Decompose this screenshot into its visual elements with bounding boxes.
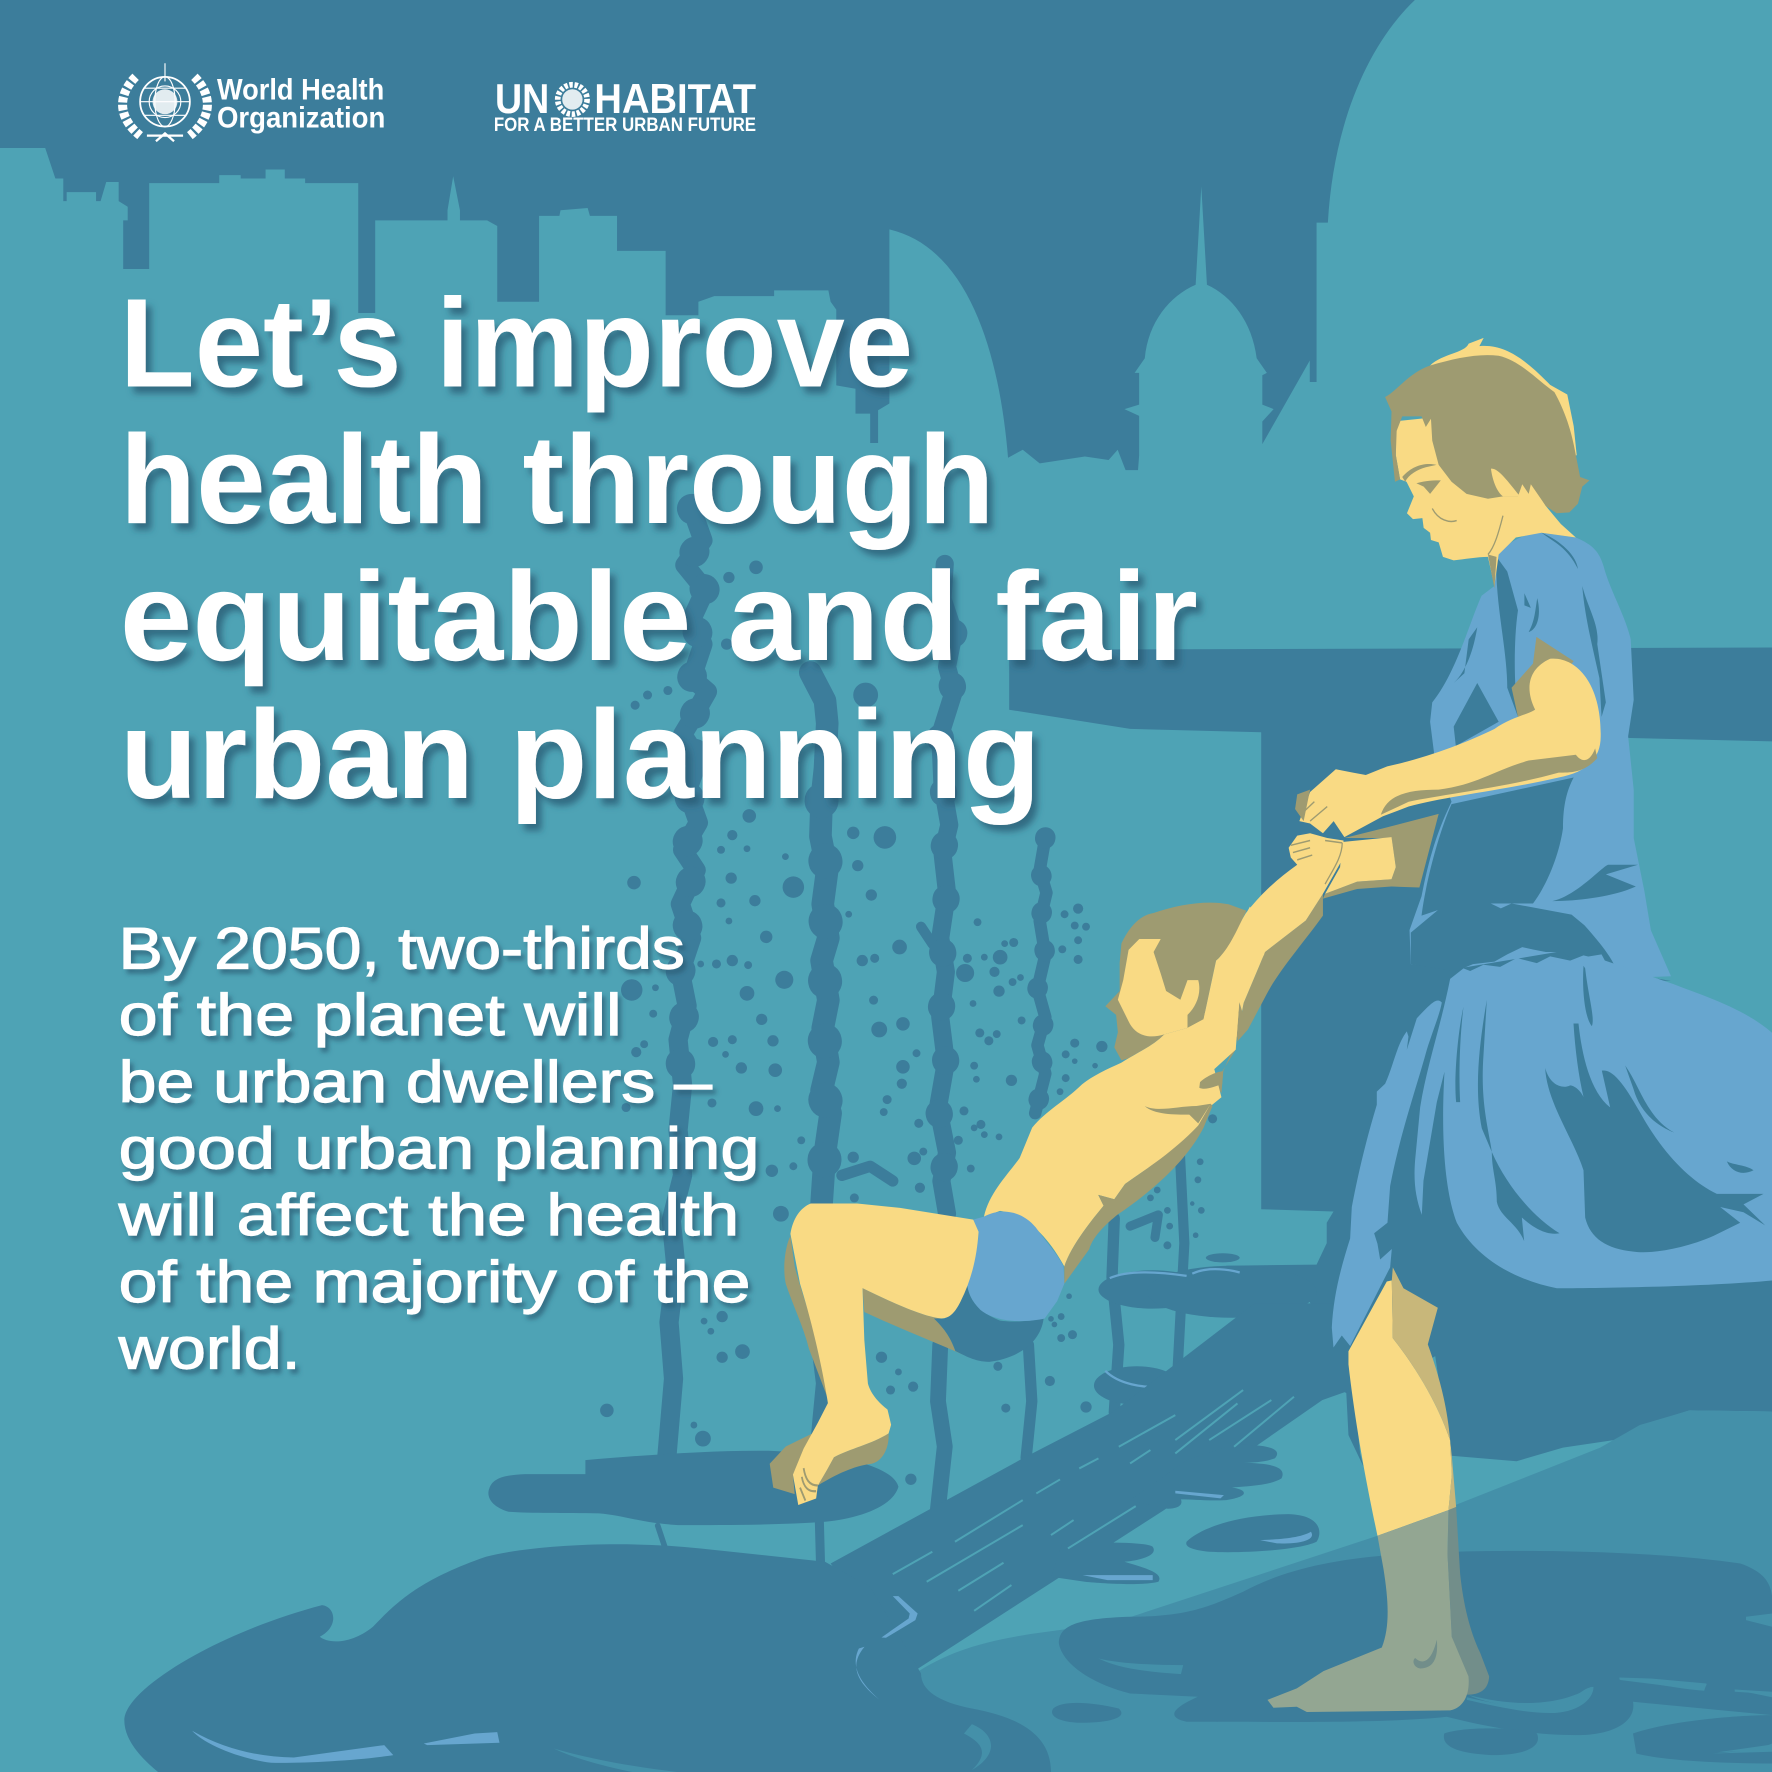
body text: of the majority of the xyxy=(119,1250,750,1315)
ripples near foot xyxy=(1467,1678,1772,1752)
round puddle xyxy=(1186,1514,1319,1552)
plank drips xyxy=(1051,1445,1283,1584)
leg back in water xyxy=(1447,1507,1489,1695)
child toes xyxy=(800,1468,818,1501)
logo: World Health Organization xyxy=(123,63,385,141)
large left puddle xyxy=(124,1544,1051,1772)
small puddles xyxy=(1052,1703,1772,1763)
child hair xyxy=(1105,903,1246,1060)
child leg xyxy=(790,1204,979,1505)
shoulder shade xyxy=(1512,637,1574,717)
tagline: FOR A BETTER URBAN FUTURE xyxy=(494,115,756,136)
title xyxy=(120,271,1198,825)
near arm xyxy=(1299,659,1601,837)
body text: of the planet will xyxy=(119,983,622,1048)
foot platform puddle xyxy=(488,1451,898,1525)
plank xyxy=(831,1303,1350,1672)
ear xyxy=(1491,469,1520,496)
WHO wordmark: World Health xyxy=(217,73,384,106)
skirt left flap xyxy=(1332,1001,1442,1348)
woman bodice xyxy=(1410,533,1671,981)
stepping stones behind the child xyxy=(1094,1253,1317,1405)
logo: UN-Habitat xyxy=(494,75,756,136)
child armpit shadow xyxy=(1214,1002,1247,1093)
skirt main xyxy=(1415,955,1772,1288)
leg shadow sliver xyxy=(1343,1338,1363,1467)
child torso xyxy=(984,906,1264,1266)
logo: World Health Organization: Organization xyxy=(217,102,385,135)
leg and foot in water xyxy=(1267,1510,1469,1712)
body text: good urban planning xyxy=(119,1117,759,1182)
wooden plank and puddles xyxy=(124,1303,1772,1772)
woman figure xyxy=(1267,338,1772,1752)
water surface xyxy=(913,1410,1772,1772)
leg shade xyxy=(1392,1267,1456,1510)
body text: world. xyxy=(117,1317,301,1382)
arm shade xyxy=(1295,748,1597,821)
hair highlight xyxy=(1430,338,1577,460)
dark building block behind figures xyxy=(1009,648,1772,1461)
child raised arm xyxy=(1237,894,1323,1042)
face and neck xyxy=(1396,416,1576,586)
title: Let’s improve xyxy=(120,271,913,413)
bodice shadow xyxy=(1411,533,1671,981)
body text: will affect the health xyxy=(117,1183,739,1248)
ankle mark xyxy=(1413,1640,1437,1668)
child thigh shadow and foot shadow xyxy=(770,1236,964,1494)
plank streaks xyxy=(893,1390,1294,1611)
hair xyxy=(1385,355,1590,513)
title: equitable and fair xyxy=(120,545,1198,687)
woman leg xyxy=(1267,1267,1772,1752)
dripping strands and spatter dots xyxy=(600,509,1217,1562)
UN letters: UN xyxy=(495,75,549,122)
far arm xyxy=(1325,837,1396,894)
woman skirt xyxy=(1332,955,1772,1348)
bare leg xyxy=(1348,1280,1452,1536)
bodice fabric xyxy=(1410,533,1671,979)
skirt folds xyxy=(1455,966,1765,1252)
right puddle xyxy=(1059,1551,1772,1735)
HABITAT letters: HABITAT xyxy=(594,75,756,122)
UN emblem xyxy=(558,85,587,114)
title: health through xyxy=(120,408,994,550)
facial features xyxy=(1402,464,1497,588)
child shorts shadow xyxy=(934,1284,1044,1362)
skyline silhouette background xyxy=(0,0,1415,470)
child shorts xyxy=(967,1212,1064,1321)
woman head and arms xyxy=(1295,338,1601,899)
far arm shadow xyxy=(1323,814,1439,899)
body text: be urban dwellers – xyxy=(119,1050,712,1115)
child torso shadow xyxy=(1064,1071,1223,1284)
body text: By 2050, two-thirds xyxy=(119,916,685,981)
child face xyxy=(1118,939,1199,1036)
body text xyxy=(117,916,759,1382)
WHO emblem xyxy=(123,63,207,141)
title: urban planning xyxy=(120,683,1041,825)
child figure xyxy=(770,802,1344,1505)
clasped hand lines xyxy=(1291,802,1342,884)
puddle highlights xyxy=(192,1491,1312,1763)
